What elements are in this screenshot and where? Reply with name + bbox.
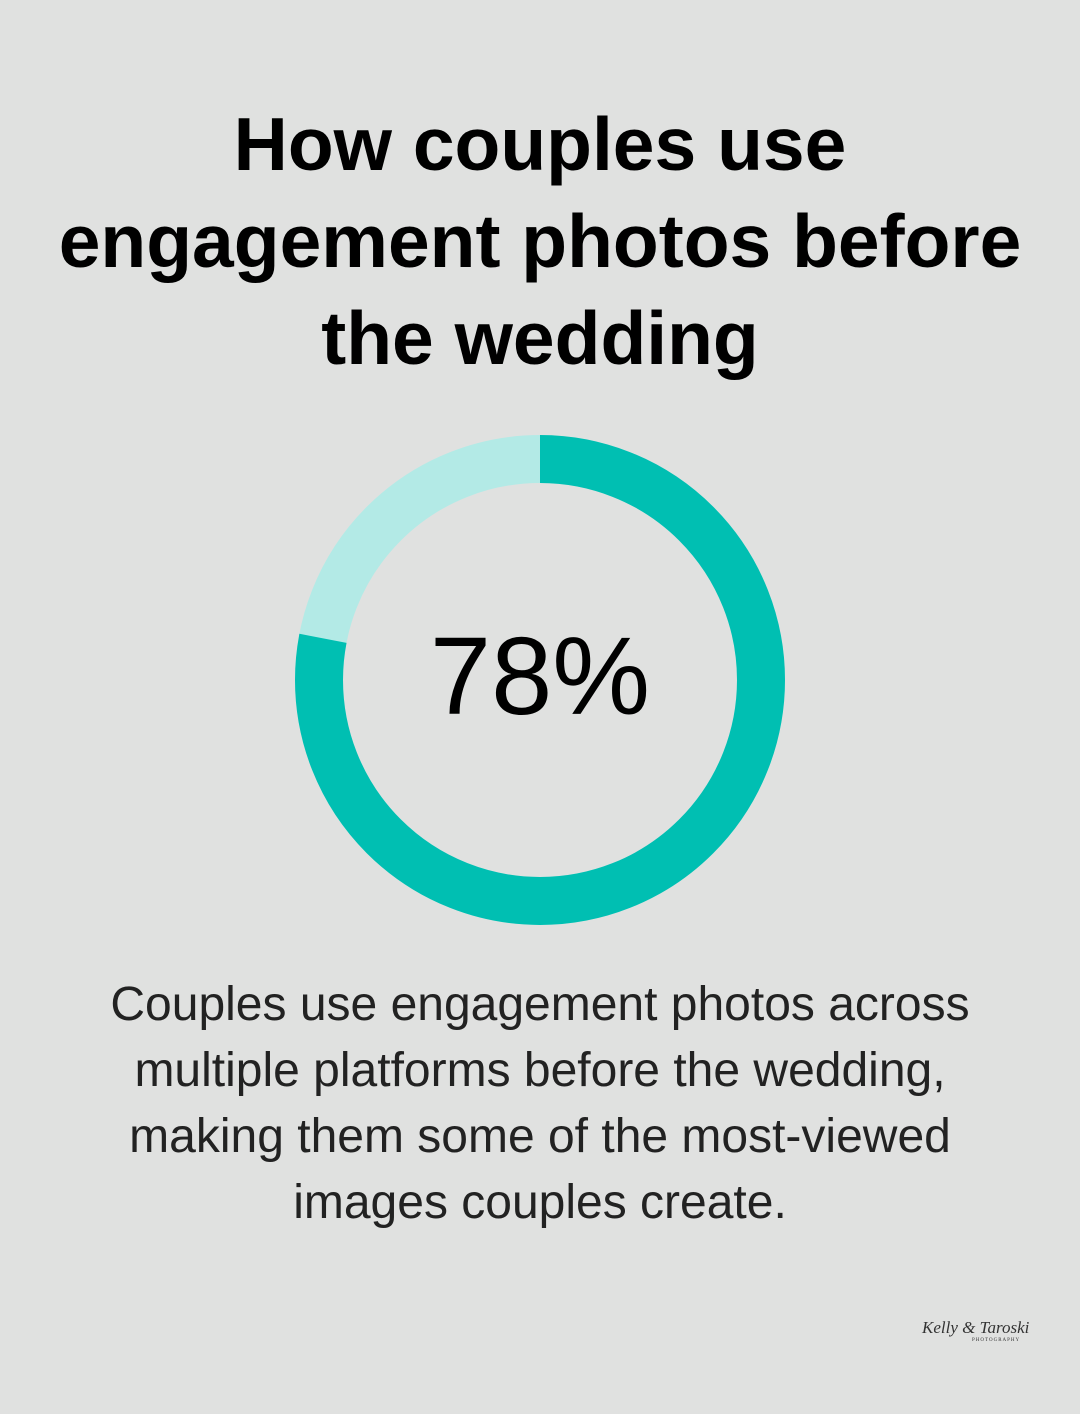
- title: the wedding: [321, 296, 759, 380]
- percentage label: 78%: [430, 615, 650, 738]
- title: How couples use: [234, 102, 846, 186]
- logo: signature: PHOTOGRAPHY: [972, 1338, 1020, 1343]
- title: [59, 102, 1021, 380]
- logo: signature: Kelly & Taroski: [922, 1318, 1029, 1337]
- donut: remaining 22%: [319, 459, 761, 901]
- description text: Couples use engagement photos across: [110, 978, 970, 1031]
- description text: [110, 978, 970, 1229]
- title: engagement photos before: [59, 199, 1021, 283]
- description text: making them some of the most-viewed: [129, 1110, 951, 1163]
- description text: multiple platforms before the wedding,: [134, 1044, 946, 1097]
- donut: 78% segment: [319, 459, 761, 901]
- description text: images couples create.: [293, 1176, 787, 1229]
